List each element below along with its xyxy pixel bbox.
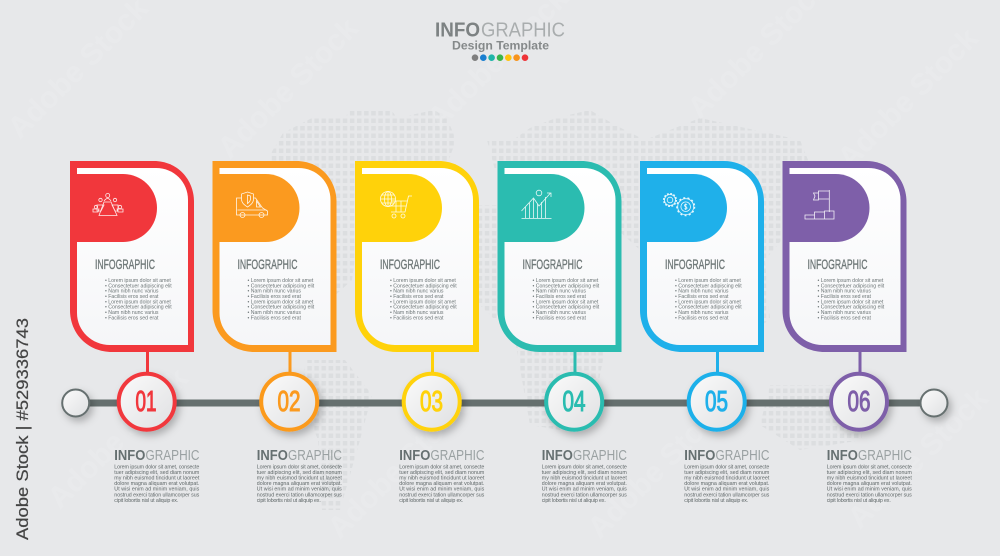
node 06 <box>831 374 887 430</box>
icon: gears with dollar <box>664 194 694 216</box>
text block 3: INFO <box>399 448 430 464</box>
bullet list: • Consectetuer adipiscing elit <box>532 305 600 311</box>
text block 6: INFO <box>827 448 858 464</box>
heading: INFOGRAPHIC <box>380 256 440 272</box>
text block 5: Lorem ipsum dolor sit amet, consecte <box>684 464 769 470</box>
text block 6: dolore magna aliquam erat volutpat. <box>827 481 912 487</box>
right end node <box>920 390 948 416</box>
bullet list <box>675 278 742 321</box>
text block 1: Lorem ipsum dolor sit amet, consecte <box>114 464 199 470</box>
text block 6: tuer adipiscing elit, sed diam nonum <box>827 470 912 476</box>
bullet list <box>248 278 315 321</box>
bullet list: • Consectetuer adipiscing elit <box>105 283 172 289</box>
text block 3: dolore magna aliquam erat volutpat. <box>399 481 484 487</box>
bullet list: • Consectetuer adipiscing elit <box>532 283 600 289</box>
text block 1: GRAPHIC <box>146 448 200 464</box>
text block 1: nostrud exerci tation ullamcorper sus <box>114 492 200 498</box>
panel: card 3 <box>355 161 479 373</box>
node 06: 06 <box>848 386 870 418</box>
text block 2: Ut wisi enim ad minim veniam, quis <box>257 487 342 493</box>
bullet list: • Nam nibh nunc varius <box>248 289 301 295</box>
bullet list: • Nam nibh nunc varius <box>675 289 729 295</box>
text block 6: nostrud exerci tation ullamcorper sus <box>827 492 912 498</box>
text block 2: cipit lobortis nisl ut aliquip ex. <box>257 498 321 504</box>
bullet list: • Consectetuer adipiscing elit <box>390 283 457 289</box>
text block 2 <box>257 448 342 504</box>
bullet list: • Facilisis eros sed erat <box>390 294 444 300</box>
watermark: Adobe Stock <box>212 12 365 165</box>
bullet list: • Nam nibh nunc varius <box>248 310 301 316</box>
icon: globe and cart <box>380 192 412 218</box>
bullet list: • Facilisis eros sed erat <box>818 294 871 300</box>
text block 5 <box>684 448 770 504</box>
bullet list: • Lorem ipsum dolor sit amet <box>532 278 599 284</box>
world map dot pattern <box>270 110 862 510</box>
heading: INFOGRAPHIC <box>665 256 725 272</box>
node 03: 03 <box>420 386 443 418</box>
text block 6: GRAPHIC <box>858 448 912 464</box>
text block 4: cipit lobortis nisl ut aliquip ex. <box>542 498 606 504</box>
bullet list: • Facilisis eros sed erat <box>248 294 301 300</box>
text block 1 <box>114 448 200 504</box>
stock id side label: Adobe Stock | #529336743 <box>14 318 32 540</box>
bullet list: • Facilisis eros sed erat <box>818 315 871 321</box>
text block 3: cipit lobortis nisl ut aliquip ex. <box>399 498 463 504</box>
bullet list: • Facilisis eros sed erat <box>105 315 159 321</box>
text block 3: tuer adipiscing elit, sed diam nonum <box>399 470 485 476</box>
panel: card 2 <box>212 161 336 373</box>
left end node <box>62 390 89 416</box>
panel: card 6 <box>782 161 906 373</box>
bullet list: • Consectetuer adipiscing elit <box>818 305 885 311</box>
watermark: Adobe Stock <box>42 362 195 515</box>
text block 4 <box>542 448 627 504</box>
text block 4: nostrud exerci tation ullamcorper sus <box>542 492 627 498</box>
bullet list <box>532 278 600 321</box>
node 02 <box>261 374 317 430</box>
watermark: Adobe Stock <box>832 22 985 175</box>
watermark: Adobe Stock <box>842 382 995 535</box>
heading: INFOGRAPHIC <box>808 256 868 272</box>
text block 2: GRAPHIC <box>288 448 342 464</box>
bullet list: • Facilisis eros sed erat <box>532 315 586 321</box>
bullet list: • Lorem ipsum dolor sit amet <box>390 278 456 284</box>
panel: card 4 <box>498 161 622 373</box>
bullet list: • Nam nibh nunc varius <box>818 289 871 295</box>
bullet list: • Consectetuer adipiscing elit <box>675 305 742 311</box>
title <box>435 20 565 52</box>
node 01 <box>119 374 175 430</box>
bullet list <box>105 278 172 321</box>
bullet list: • Lorem ipsum dolor sit amet <box>675 299 741 305</box>
text block 6: my nibh euismod tincidunt ut laoreet <box>827 476 912 482</box>
text block 3: my nibh euismod tincidunt ut laoreet <box>399 476 485 482</box>
node 03 <box>404 374 460 430</box>
node 05: 05 <box>705 386 728 418</box>
text block 3 <box>399 448 485 504</box>
text block 1: cipit lobortis nisl ut aliquip ex. <box>114 498 178 504</box>
text block 5: Ut wisi enim ad minim veniam, quis <box>684 487 770 493</box>
bullet list: • Nam nibh nunc varius <box>818 310 871 316</box>
bullet list: • Lorem ipsum dolor sit amet <box>532 299 599 305</box>
bullet list: • Facilisis eros sed erat <box>248 315 301 321</box>
panel: card 5 <box>640 161 764 373</box>
text block 2: INFO <box>257 448 288 464</box>
text block 5: INFO <box>684 448 715 464</box>
bullet list: • Nam nibh nunc varius <box>675 310 729 316</box>
text block 2: Lorem ipsum dolor sit amet, consecte <box>257 464 342 470</box>
bullet list: • Lorem ipsum dolor sit amet <box>105 299 171 305</box>
bullet list <box>390 278 457 321</box>
bullet list: • Consectetuer adipiscing elit <box>105 305 172 311</box>
node 05 <box>689 374 745 430</box>
node 04 <box>546 374 602 430</box>
text block 6 <box>827 448 912 504</box>
bullet list: • Nam nibh nunc varius <box>105 289 159 295</box>
text block 1: dolore magna aliquam erat volutpat. <box>114 481 199 487</box>
bullet list: • Consectetuer adipiscing elit <box>675 283 742 289</box>
text block 2: nostrud exerci tation ullamcorper sus <box>257 492 342 498</box>
bullet list: • Nam nibh nunc varius <box>390 310 444 316</box>
bullet list: • Facilisis eros sed erat <box>390 315 444 321</box>
text block 3: Ut wisi enim ad minim veniam, quis <box>399 487 485 493</box>
heading: INFOGRAPHIC <box>95 256 155 272</box>
text block 5: nostrud exerci tation ullamcorper sus <box>684 492 770 498</box>
bullet list: • Consectetuer adipiscing elit <box>248 305 315 311</box>
text block 4: dolore magna aliquam erat volutpat. <box>542 481 627 487</box>
bullet list: • Lorem ipsum dolor sit amet <box>248 278 314 284</box>
bullet list: • Facilisis eros sed erat <box>675 294 729 300</box>
bullet list <box>818 278 885 321</box>
bullet list: • Lorem ipsum dolor sit amet <box>818 278 884 284</box>
watermark: Adobe Stock <box>322 392 475 545</box>
bullet list: • Facilisis eros sed erat <box>675 315 729 321</box>
bullet list: • Nam nibh nunc varius <box>532 289 586 295</box>
text block 4: Lorem ipsum dolor sit amet, consecte <box>542 464 627 470</box>
bullet list: • Consectetuer adipiscing elit <box>390 305 457 311</box>
bullet list: • Lorem ipsum dolor sit amet <box>818 299 884 305</box>
bullet list: • Lorem ipsum dolor sit amet <box>105 278 171 284</box>
heading: INFOGRAPHIC <box>522 256 582 272</box>
text block 2: my nibh euismod tincidunt ut laoreet <box>257 476 342 482</box>
heading: INFOGRAPHIC <box>238 256 298 272</box>
text block 5: cipit lobortis nisl ut aliquip ex. <box>684 498 748 504</box>
bullet list: • Lorem ipsum dolor sit amet <box>675 278 741 284</box>
title: Design Template <box>452 38 549 52</box>
text block 4: GRAPHIC <box>573 448 627 464</box>
watermark: Adobe Stock <box>582 392 735 545</box>
text block 2: tuer adipiscing elit, sed diam nonum <box>257 470 342 476</box>
colour dots <box>472 54 528 61</box>
text block 4: my nibh euismod tincidunt ut laoreet <box>542 476 627 482</box>
node 02: 02 <box>278 386 300 418</box>
bullet list: • Consectetuer adipiscing elit <box>248 283 315 289</box>
bullet list: • Nam nibh nunc varius <box>532 310 586 316</box>
text block 4: Ut wisi enim ad minim veniam, quis <box>542 487 627 493</box>
title: GRAPHIC <box>481 20 565 42</box>
text block 1: my nibh euismod tincidunt ut laoreet <box>114 476 200 482</box>
bullet list: • Facilisis eros sed erat <box>532 294 586 300</box>
panel: card 1 <box>70 161 194 373</box>
bullet list: • Nam nibh nunc varius <box>105 310 159 316</box>
icon: van with shield <box>236 192 268 218</box>
node 01: 01 <box>136 386 156 418</box>
text block 3: Lorem ipsum dolor sit amet, consecte <box>399 464 484 470</box>
text block 6: cipit lobortis nisl ut aliquip ex. <box>827 498 891 504</box>
bullet list: • Nam nibh nunc varius <box>390 289 444 295</box>
icon: flag on podium <box>805 190 834 219</box>
text block 6: Ut wisi enim ad minim veniam, quis <box>827 487 912 493</box>
text block 5: GRAPHIC <box>716 448 770 464</box>
text block 1: Ut wisi enim ad minim veniam, quis <box>114 487 200 493</box>
text block 3: nostrud exerci tation ullamcorper sus <box>399 492 485 498</box>
bullet list: • Lorem ipsum dolor sit amet <box>390 299 456 305</box>
timeline bar <box>85 400 925 406</box>
icon: growth chart with person <box>522 190 552 218</box>
text block 6: Lorem ipsum dolor sit amet, consecte <box>827 464 912 470</box>
bullet list: • Lorem ipsum dolor sit amet <box>248 299 314 305</box>
text block 5: dolore magna aliquam erat volutpat. <box>684 481 769 487</box>
text block 1: tuer adipiscing elit, sed diam nonum <box>114 470 200 476</box>
title: INFO <box>435 20 480 42</box>
text block 3: GRAPHIC <box>430 448 484 464</box>
text block 5: my nibh euismod tincidunt ut laoreet <box>684 476 770 482</box>
text block 4: INFO <box>542 448 573 464</box>
bullet list: • Facilisis eros sed erat <box>105 294 159 300</box>
node 04: 04 <box>562 386 586 418</box>
text block 2: dolore magna aliquam erat volutpat. <box>257 481 342 487</box>
icon: people on pyramid <box>93 194 123 216</box>
text block 4: tuer adipiscing elit, sed diam nonum <box>542 470 627 476</box>
text block 5: tuer adipiscing elit, sed diam nonum <box>684 470 770 476</box>
bullet list: • Consectetuer adipiscing elit <box>818 283 885 289</box>
text block 1: INFO <box>114 448 145 464</box>
